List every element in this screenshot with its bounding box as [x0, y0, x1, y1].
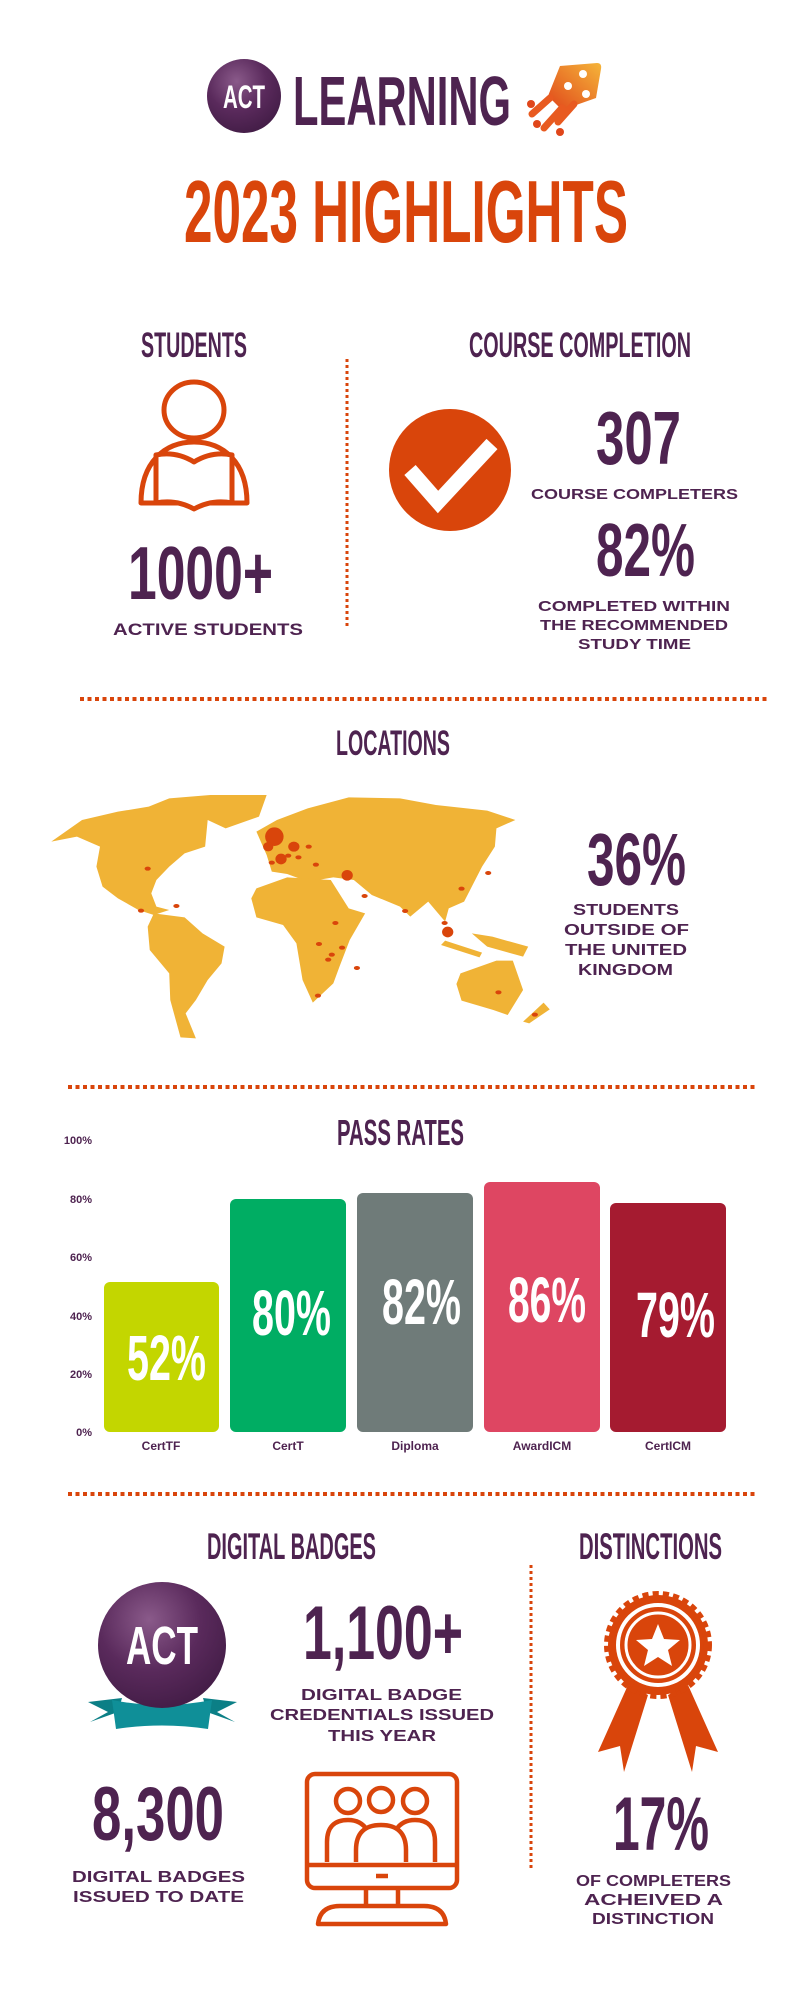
stat: 307: 307	[596, 396, 681, 480]
y axis labels: 60%	[70, 1252, 92, 1264]
label: of completers: OF COMPLETERS	[576, 1873, 731, 1890]
label: completed within: STUDY TIME	[578, 636, 691, 653]
heading: digital badges: DIGITAL BADGES	[207, 1526, 376, 1567]
label: issued to date: DIGITAL BADGES	[72, 1869, 245, 1886]
panel: distinctions	[576, 1526, 731, 1928]
y axis labels: 20%	[70, 1369, 92, 1381]
label: issued to date: ISSUED TO DATE	[73, 1889, 244, 1906]
stat: 8,300: 8,300	[92, 1772, 224, 1857]
logo	[207, 59, 601, 140]
stat: 1000+: 1000+	[128, 531, 273, 615]
panel: digital badges	[72, 1526, 494, 1924]
y axis labels: 0%	[76, 1427, 92, 1439]
label: of completers	[576, 1873, 731, 1928]
bar chart: CertICM	[645, 1439, 691, 1453]
label: credentials this year: DIGITAL BADGE	[301, 1687, 462, 1704]
bar chart: 79%	[636, 1279, 715, 1351]
label: active students: ACTIVE STUDENTS	[113, 620, 303, 639]
icon: rocket	[527, 63, 601, 136]
bar chart: AwardICM	[513, 1439, 571, 1453]
heading: students: STUDENTS	[141, 326, 247, 365]
label: completed within	[538, 598, 730, 653]
heading: pass rates: PASS RATES	[337, 1112, 464, 1153]
y axis labels: 100%	[64, 1135, 92, 1147]
label: completed within: COMPLETED WITHIN	[538, 598, 730, 615]
icon: ACT badge	[88, 1582, 237, 1729]
label: students outside uk: STUDENTS	[573, 902, 679, 919]
logo wordmark: LEARNING	[293, 62, 511, 140]
bar chart: Diploma	[391, 1439, 439, 1453]
heading: locations: LOCATIONS	[336, 724, 450, 763]
label: course completers: COURSE COMPLETERS	[531, 486, 738, 503]
bar chart: 52%	[127, 1322, 206, 1394]
stat: 1,100+: 1,100+	[303, 1591, 463, 1676]
panel: locations	[51, 724, 689, 1038]
panel: pass rates	[64, 1112, 726, 1453]
label: credentials this year: CREDENTIALS ISSUED	[270, 1707, 494, 1724]
bar chart: 80%	[252, 1277, 331, 1349]
icon: student reading	[141, 382, 247, 509]
world map	[51, 795, 550, 1038]
label: issued to date	[72, 1869, 245, 1906]
bar chart	[104, 1182, 726, 1453]
label: students outside uk	[564, 902, 689, 979]
label: of completers: DISTINCTION	[592, 1911, 714, 1928]
icon: ACT circle: ACT	[223, 79, 265, 115]
panel: course completion	[389, 326, 738, 653]
bar chart: 82%	[382, 1266, 461, 1338]
label: students outside uk: OUTSIDE OF	[564, 922, 689, 939]
stat: 36%: 36%	[587, 818, 686, 901]
icon: ACT badge: ACT	[126, 1616, 198, 1676]
label: students outside uk: THE UNITED	[565, 942, 687, 959]
label: credentials this year: THIS YEAR	[328, 1728, 437, 1745]
label: credentials this year	[270, 1687, 494, 1745]
icon: check circle	[389, 409, 511, 531]
y axis labels: 40%	[70, 1311, 92, 1323]
bar chart: CertT	[272, 1439, 304, 1453]
bar chart: 86%	[508, 1264, 586, 1336]
icon: ACT circle	[207, 59, 281, 133]
panel: students	[113, 326, 303, 639]
label: of completers: ACHEIVED A	[584, 1892, 724, 1909]
label: students outside uk: KINGDOM	[578, 962, 673, 979]
y axis labels: 80%	[70, 1194, 92, 1206]
icon: award rosette	[598, 1595, 718, 1772]
icon: monitor with people	[307, 1774, 457, 1924]
bar chart: CertTF	[142, 1439, 180, 1453]
y axis labels	[64, 1135, 92, 1439]
label: completed within: THE RECOMMENDED	[540, 617, 728, 634]
stat: 82%: 82%	[596, 508, 695, 592]
stat: 17%: 17%	[613, 1782, 709, 1867]
